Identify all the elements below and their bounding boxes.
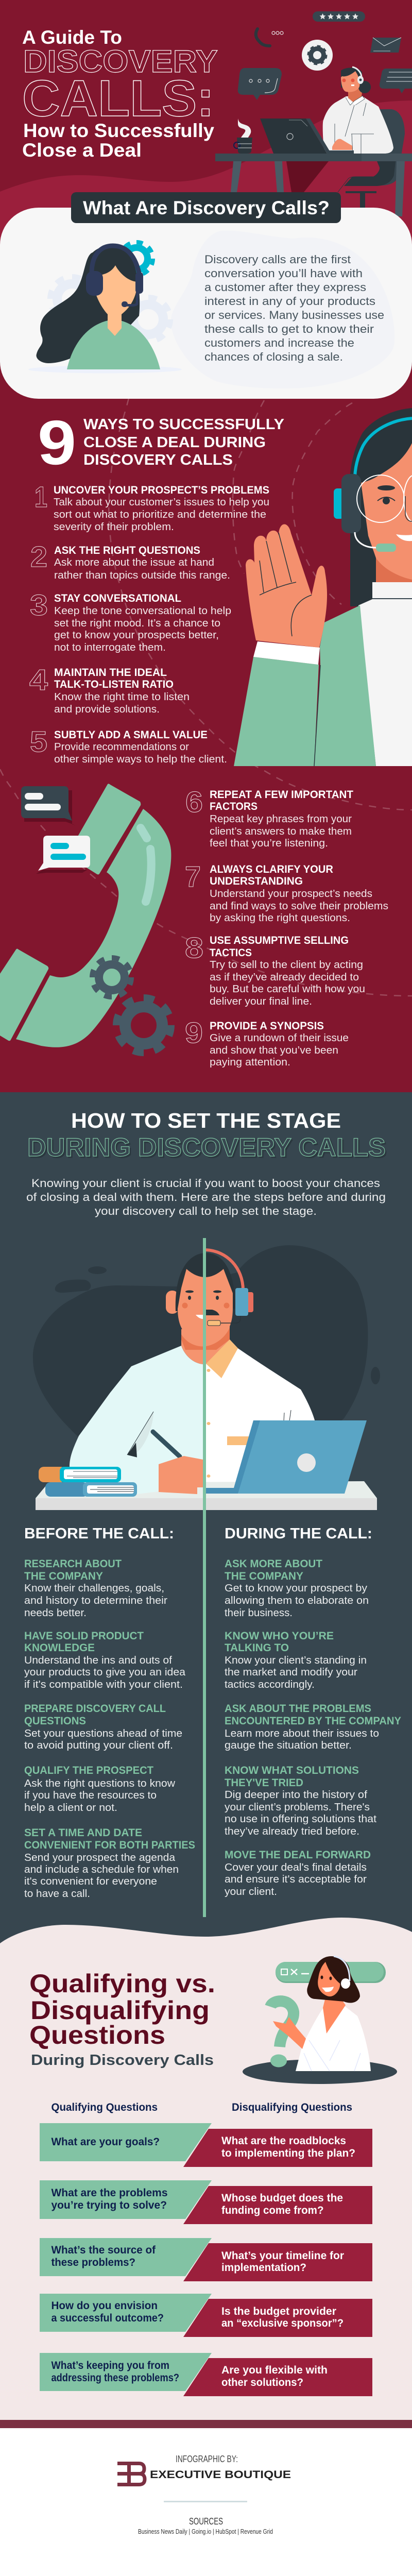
question row 5: What’s keeping you from: [52, 2360, 169, 2371]
tip 4: Know the right time to listen: [54, 691, 190, 703]
question row 1: [40, 2123, 372, 2167]
tip 1: [35, 481, 269, 533]
step: qualify: help a client or not.: [24, 1802, 117, 1814]
step: solutions tried: no use in offering solutions that: [225, 1814, 376, 1825]
sources: Business News Daily | Going.io | HubSpot | Revenue Grid: [138, 2528, 273, 2535]
logo wordmark: EXECUTIVE BOUTIQUE: [150, 2469, 291, 2481]
cuff: [253, 641, 320, 665]
tip 2: [30, 540, 230, 581]
footer credit: INFOGRAPHIC BY:: [176, 2454, 238, 2464]
heading: how to set the stage: HOW TO SET THE STAGE: [71, 1109, 341, 1132]
panel: what are discovery calls: [0, 208, 412, 399]
heading: how to set the stage: DURING DISCOVERY CALLS: [27, 1133, 386, 1162]
illustration: man split in half at desk: [33, 1245, 380, 1510]
tip 8: TACTICS: [210, 947, 252, 959]
handset: [0, 784, 171, 1047]
tip 5: other simple ways to help the client.: [54, 754, 227, 765]
intro text: of closing a deal with them. Here are the steps before and during: [26, 1191, 386, 1204]
hand: [246, 524, 327, 648]
step: move forward: your client.: [225, 1886, 277, 1897]
heading line: Close a Deal: Close a Deal: [22, 140, 142, 161]
tip 8: buy. But be careful with how you: [210, 984, 365, 995]
step: move forward: [225, 1849, 371, 1897]
tip 3: 3: [30, 589, 48, 622]
step: ask about problems: gauge the situation better.: [225, 1740, 352, 1751]
heading bar: What Are Discovery Calls: What Are Discovery Calls?: [83, 197, 330, 218]
icon: gear circle: [302, 40, 333, 71]
chat bubble dark: [21, 786, 76, 825]
tip 8: Try to sell to the client by acting: [210, 959, 363, 971]
heading text: [83, 416, 284, 468]
heading: how to set the stage: DURING DISCOVERY CALLS: [29, 1134, 387, 1163]
books: [39, 1467, 137, 1497]
text block: definition: chances of closing a sale.: [204, 350, 343, 363]
panel: qualifying section background: [0, 1918, 412, 2420]
tip 1: UNCOVER YOUR PROSPECT’S PROBLEMS: [54, 484, 269, 496]
step: set a time: to have a call.: [24, 1888, 90, 1900]
icon: speech bubble right: [380, 69, 412, 93]
icon: cyan gear: [120, 242, 153, 275]
headset: [334, 488, 344, 519]
tip 9: and show that you’ve been: [210, 1045, 338, 1056]
text block: definition: conversation you’ll have with: [204, 267, 363, 280]
tip 7: [185, 860, 388, 924]
question row 1: to implementing the plan?: [221, 2147, 355, 2159]
text block: definition: customers and increase the: [204, 336, 354, 349]
intro text: Knowing your client is crucial if you want to boost your chances: [31, 1177, 380, 1190]
step: know who: Know your client’s standing in: [225, 1655, 367, 1666]
step: know who: TALKING TO: [225, 1642, 289, 1654]
tip 1: Talk about your customer’s issues to help you: [54, 497, 269, 508]
sources: [138, 2516, 273, 2535]
question row 3: [40, 2238, 372, 2281]
tip 5: SUBTLY ADD A SMALL VALUE: [54, 729, 208, 741]
question row 4: [40, 2294, 372, 2337]
step: know who: the market and modify your: [225, 1667, 357, 1678]
tip 7: by asking the right questions.: [210, 912, 350, 924]
footer credit: [117, 2454, 291, 2486]
tip 3: Keep the tone conversational to help: [54, 605, 231, 617]
text block: definition: these calls to get to know their: [204, 323, 374, 335]
tip 8: deliver your final line.: [210, 996, 312, 1007]
header illustration: agent at desk: [215, 11, 412, 216]
step: prepare questions: Set your questions ahead of time: [24, 1728, 182, 1739]
question row 2: funding come from?: [221, 2205, 323, 2216]
question row 4: an “exclusive sponsor”?: [221, 2317, 344, 2329]
step: ask about problems: ASK ABOUT THE PROBLEMS: [225, 1703, 371, 1715]
question row 2: Whose budget does the: [221, 2192, 343, 2204]
heading: qualifying vs disqualifying: Disqualifying: [30, 1996, 210, 2025]
step: prepare questions: to avoid putting your client off.: [24, 1740, 173, 1751]
step: know who: KNOW WHO YOU’RE: [225, 1630, 334, 1642]
illustration: agent with question mark: [243, 1956, 397, 2084]
head: [206, 1250, 243, 1291]
shirt: [358, 599, 412, 766]
jacket: [314, 605, 376, 766]
question row 4: Is the budget provider: [221, 2306, 336, 2317]
illustration: phone handset with chat bubbles and gears: [0, 784, 171, 1053]
tip 7: 7: [185, 860, 201, 893]
step: ask more: Get to know your prospect by: [225, 1583, 367, 1594]
question row 3: these problems?: [52, 2257, 135, 2268]
step: product knowledge: HAVE SOLID PRODUCT: [24, 1630, 144, 1642]
step: product knowledge: [24, 1630, 186, 1690]
icons: pale gears: [50, 277, 170, 342]
question row 5: Are you flexible with: [221, 2364, 328, 2376]
question row 3: implementation?: [221, 2262, 306, 2274]
tip 2: 2: [30, 540, 47, 573]
tip 2: ASK THE RIGHT QUESTIONS: [54, 545, 200, 556]
icon: phone: [256, 29, 283, 46]
tip 8: [185, 931, 365, 1007]
question row 3: What’s your timeline for: [221, 2250, 344, 2262]
tip 6: feel that you’re listening.: [210, 838, 328, 849]
tip 6: 6: [185, 786, 203, 819]
step: solutions tried: KNOW WHAT SOLUTIONS: [225, 1765, 359, 1776]
intro text: your discovery call to help set the stage.: [95, 1205, 317, 1217]
browser window pill: [276, 1962, 386, 1983]
vertical divider: [203, 1238, 206, 1917]
collar: [372, 582, 412, 599]
tip 6: FACTORS: [210, 801, 258, 812]
step: move forward: MOVE THE DEAL FORWARD: [225, 1849, 371, 1861]
column: before the call: [24, 1526, 195, 1900]
tip 7: UNDERSTANDING: [210, 875, 303, 887]
step: move forward: and ensure it's acceptable for: [225, 1874, 367, 1885]
step: set a time: Send your prospect the agenda: [24, 1852, 176, 1863]
question row 5: other solutions?: [221, 2377, 303, 2388]
step: set a time: and include a schedule for when: [24, 1864, 179, 1875]
tip 7: ALWAYS CLARIFY YOUR: [210, 863, 333, 875]
column heading: DURING THE CALL:: [225, 1526, 372, 1542]
column: during the call: [225, 1526, 401, 1897]
tip 3: STAY CONVERSATIONAL: [54, 592, 181, 604]
heading: qualifying vs disqualifying: Qualifying vs.: [29, 1969, 215, 1998]
question row 4: a successful outcome?: [52, 2312, 164, 2324]
step: ask more: their business.: [225, 1607, 293, 1619]
step: ask about problems: Learn more about their issues to: [225, 1728, 379, 1739]
heading line: CALLS: CALLS:: [22, 70, 214, 127]
step: know who: [225, 1630, 367, 1690]
tip 4: [29, 664, 190, 715]
heading: 9 ways: [38, 408, 284, 478]
icon: envelope: [370, 38, 401, 53]
chat bubble light: [36, 836, 90, 874]
step: ask about problems: [225, 1703, 401, 1751]
text block: definition: Discovery calls are the first: [204, 253, 351, 266]
column headers: Qualifying Questions: [52, 2102, 158, 2113]
blob behind text: [171, 231, 394, 388]
text block: definition: or services. Many businesses use: [204, 309, 384, 321]
tip 6: client’s answers to make them: [210, 826, 352, 837]
step: ask more: [225, 1558, 369, 1619]
question row 2: you’re trying to solve?: [52, 2199, 167, 2211]
step: product knowledge: Understand the ins and outs of: [24, 1655, 172, 1666]
tip 3: [30, 589, 231, 653]
step: product knowledge: KNOWLEDGE: [24, 1642, 95, 1654]
tip 4: MAINTAIN THE IDEAL: [54, 667, 167, 679]
text block: definition: [204, 253, 384, 363]
step: prepare questions: [24, 1703, 182, 1751]
tip 5: Provide recommendations or: [54, 741, 189, 753]
desk: [215, 154, 362, 161]
hand and cuff: [107, 1455, 159, 1494]
tip 7: and find ways to solve their problems: [210, 901, 388, 912]
tip 9: PROVIDE A SYNOPSIS: [210, 1020, 324, 1032]
step: ask more: THE COMPANY: [225, 1570, 303, 1582]
question row 2: What are the problems: [52, 2187, 168, 2199]
tip 9: [185, 1016, 349, 1068]
tip 3: not to interrogate them.: [54, 642, 166, 653]
tip 8: USE ASSUMPTIVE SELLING: [210, 935, 349, 946]
tip 4: 4: [29, 664, 48, 697]
step: research: THE COMPANY: [24, 1570, 103, 1582]
step: product knowledge: if it's compatible with your client.: [24, 1679, 183, 1690]
tip 3: get to know your prospects better,: [54, 630, 219, 641]
question row 5: [40, 2353, 372, 2396]
step: solutions tried: [225, 1765, 376, 1837]
woman: [296, 2006, 371, 2071]
panel: set the stage background: [0, 1092, 412, 1958]
heading line: DISCOVERY: DISCOVERY: [23, 44, 218, 79]
tip 5: [30, 725, 227, 765]
text block: definition: interest in any of your products: [204, 295, 375, 308]
tip 1: severity of their problem.: [54, 521, 174, 533]
tip 9: Give a rundown of their issue: [210, 1032, 349, 1044]
sources: SOURCES: [189, 2516, 223, 2527]
laptop: [206, 1420, 367, 1494]
step: solutions tried: they’ve already tried before.: [225, 1826, 359, 1837]
heading text: CLOSE A DEAL DURING: [83, 434, 266, 451]
heading: qualifying vs disqualifying: Questions: [29, 2021, 165, 2049]
step: set a time: it's convenient for everyone: [24, 1876, 157, 1887]
heading line: A Guide To: A Guide To: [22, 27, 122, 48]
illustration: big agent waving: [234, 408, 412, 766]
heading bar: What Are Discovery Calls: [71, 192, 341, 223]
tip 9: 9: [185, 1016, 203, 1049]
tip 5: 5: [30, 725, 47, 758]
step: know who: tactics accordingly.: [225, 1679, 315, 1690]
question row 5: addressing these problems?: [52, 2372, 179, 2384]
column headers: Disqualifying Questions: [232, 2102, 352, 2113]
tip 6: [185, 786, 353, 849]
tip 1: 1: [35, 481, 47, 514]
heading text: DISCOVERY CALLS: [83, 452, 233, 468]
tip 8: as if they’ve already decided to: [210, 972, 359, 983]
step: ask more: ASK MORE ABOUT: [225, 1558, 322, 1570]
heading line: How to Successfully: How to Successfully: [23, 120, 214, 141]
cup: [234, 118, 252, 154]
step: set a time: [24, 1827, 195, 1900]
column headers: [52, 2102, 352, 2113]
step: solutions tried: your client’s problems. There's: [225, 1802, 370, 1813]
step: research: Know their challenges, goals,: [24, 1583, 164, 1594]
tip 3: set the right mood. It’s a chance to: [54, 618, 220, 629]
step: set a time: SET A TIME AND DATE: [24, 1827, 142, 1839]
tip 6: Repeat key phrases from your: [210, 814, 352, 825]
legs: [286, 161, 329, 192]
title: [22, 27, 218, 161]
icon: star rating: [313, 11, 365, 22]
body: [70, 1346, 204, 1494]
step: prepare questions: QUESTIONS: [24, 1715, 86, 1727]
step: prepare questions: PREPARE DISCOVERY CALL: [24, 1703, 166, 1715]
tip 6: REPEAT A FEW IMPORTANT: [210, 789, 353, 801]
woman: [323, 96, 393, 154]
tip 8: 8: [185, 931, 203, 964]
step: qualify: [24, 1765, 176, 1814]
step: research: and history to determine their: [24, 1595, 167, 1606]
text block: definition: a customer after they express: [204, 281, 366, 294]
big numeral 9: 9: [38, 408, 76, 478]
tip 9: paying attention.: [210, 1057, 290, 1068]
icon: small gear: [92, 958, 131, 997]
heading: qualifying vs disqualifying: [29, 1969, 215, 2069]
intro text: [26, 1177, 386, 1217]
tip 1: sort out what to prioritize and determine the: [54, 509, 266, 520]
logo mark: [117, 2462, 145, 2486]
step: research: needs better.: [24, 1607, 87, 1619]
icon: large gear: [116, 998, 171, 1053]
heading: how to set the stage: [27, 1109, 387, 1163]
step: research: [24, 1558, 167, 1619]
step: solutions tried: Dig deeper into the history of: [225, 1789, 367, 1801]
step: move forward: Cover your deal's final details: [225, 1862, 367, 1873]
question row 1: What are the roadblocks: [221, 2135, 346, 2147]
step: qualify: if you have the resources to: [24, 1790, 157, 1801]
tip 4: and provide solutions.: [54, 704, 160, 715]
column heading: BEFORE THE CALL:: [24, 1526, 174, 1542]
step: ask more: allowing them to elaborate on: [225, 1595, 369, 1606]
question row 4: How do you envision: [52, 2300, 158, 2312]
question mark: [270, 2001, 294, 2067]
step: research: RESEARCH ABOUT: [24, 1558, 122, 1570]
desk: [36, 1481, 377, 1498]
question row 3: What’s the source of: [52, 2244, 156, 2256]
heading text: WAYS TO SUCCESSFULLY: [83, 416, 284, 433]
tip 2: rather than topics outside this range.: [54, 570, 230, 581]
icon: speech bubble left: [238, 68, 282, 100]
step: product knowledge: your products to give you an idea: [24, 1667, 186, 1678]
question row 2: [40, 2180, 372, 2224]
step: qualify: QUALIFY THE PROSPECT: [24, 1765, 153, 1776]
tip 7: Understand your prospect’s needs: [210, 888, 372, 900]
tip 2: Ask more about the issue at hand: [54, 557, 214, 568]
laptop: [260, 118, 354, 154]
step: set a time: CONVENIENT FOR BOTH PARTIES: [24, 1839, 195, 1851]
step: qualify: Ask the right questions to know: [24, 1778, 176, 1789]
step: solutions tried: THEY'VE TRIED: [225, 1777, 303, 1789]
heading: qualifying vs disqualifying: During Discovery Calls: [31, 2052, 214, 2069]
illustration: agent with headset: [28, 242, 182, 373]
chair: [380, 109, 405, 185]
step: ask about problems: ENCOUNTERED BY THE COMPANY: [225, 1715, 401, 1727]
tip 4: TALK-TO-LISTEN RATIO: [54, 679, 174, 690]
question row 1: What are your goals?: [52, 2136, 160, 2148]
